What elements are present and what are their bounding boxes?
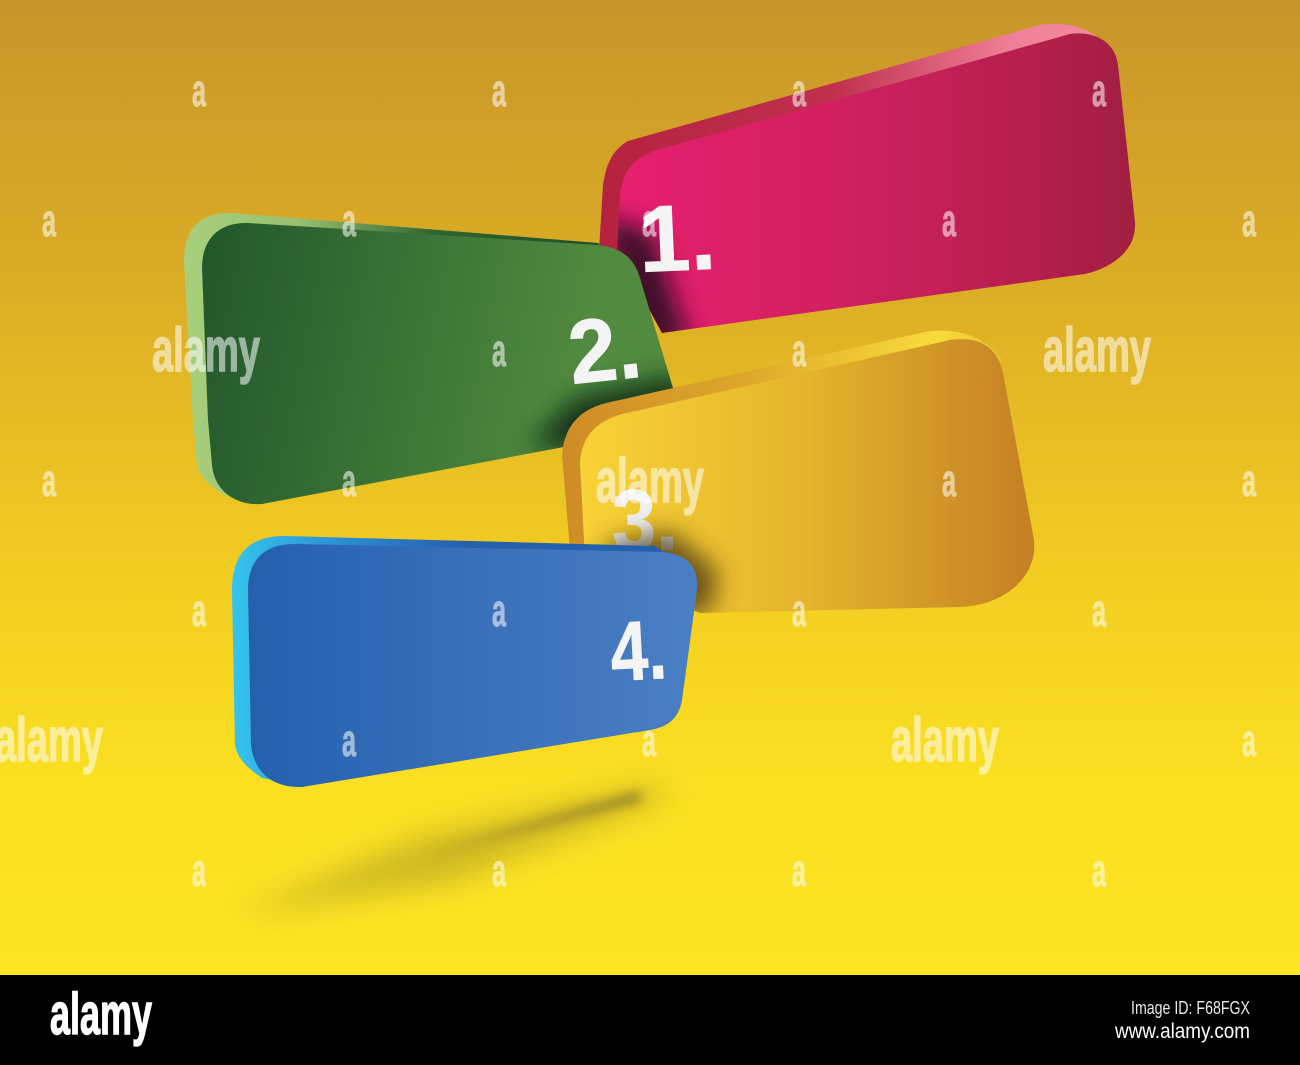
panel 4: blue	[232, 536, 697, 787]
watermarks: a	[342, 715, 357, 766]
watermarks: a	[192, 585, 207, 636]
number 4: 4.	[608, 602, 669, 699]
watermarks: a	[642, 715, 657, 766]
watermarks: a	[1242, 455, 1257, 506]
watermarks: a	[942, 195, 957, 246]
number 1: 1.	[636, 184, 718, 292]
number 3: 3.	[612, 473, 678, 569]
shadow cast by blue box on gold	[600, 530, 718, 620]
blue box side faces	[232, 536, 690, 786]
watermarks: a	[642, 195, 657, 246]
panel 3: gold	[562, 331, 1034, 620]
green box side faces	[184, 213, 640, 504]
panel 2: green	[184, 213, 690, 504]
pink box side faces	[599, 24, 1118, 300]
watermarks: a	[942, 455, 957, 506]
watermarks: a	[192, 65, 207, 116]
pink box front face	[617, 33, 1135, 333]
watermarks: a	[492, 845, 507, 896]
footer bar	[0, 975, 1300, 1065]
watermarks: a	[792, 845, 807, 896]
shadow cast by green box on pink	[600, 215, 690, 345]
watermarks: a	[492, 65, 507, 116]
watermarks: alamy	[596, 447, 704, 516]
gold box side faces	[562, 331, 1002, 560]
watermarks: a	[1092, 65, 1107, 116]
watermarks: a	[492, 325, 507, 376]
watermarks: alamy	[152, 316, 260, 385]
watermarks: a	[192, 845, 207, 896]
watermarks: a	[792, 65, 807, 116]
watermarks: a	[42, 195, 57, 246]
watermarks: a	[342, 195, 357, 246]
watermarks: a	[1242, 195, 1257, 246]
watermarks: a	[1092, 845, 1107, 896]
watermarks: a	[792, 585, 807, 636]
floor shadow	[235, 785, 670, 915]
watermarks: a	[1092, 585, 1107, 636]
footer logo: alamy	[50, 982, 152, 1047]
number 2: 2.	[564, 297, 646, 404]
watermarks: a	[42, 455, 57, 506]
watermarks: a	[492, 585, 507, 636]
watermarks: a	[342, 455, 357, 506]
website: www.alamy.com	[1114, 1020, 1250, 1043]
watermarks	[0, 65, 1257, 896]
watermarks: alamy	[0, 706, 103, 775]
watermarks: a	[792, 325, 807, 376]
panel 1: pink	[599, 24, 1135, 345]
shadow cast by gold box on green	[530, 375, 690, 450]
image id: Image ID: F68FGX	[1131, 998, 1250, 1018]
watermarks: alamy	[891, 706, 999, 775]
blue box front face	[248, 544, 697, 787]
gold box front face	[580, 339, 1034, 613]
watermarks: a	[1242, 715, 1257, 766]
green box front face	[202, 223, 680, 504]
watermarks: alamy	[1043, 316, 1151, 385]
